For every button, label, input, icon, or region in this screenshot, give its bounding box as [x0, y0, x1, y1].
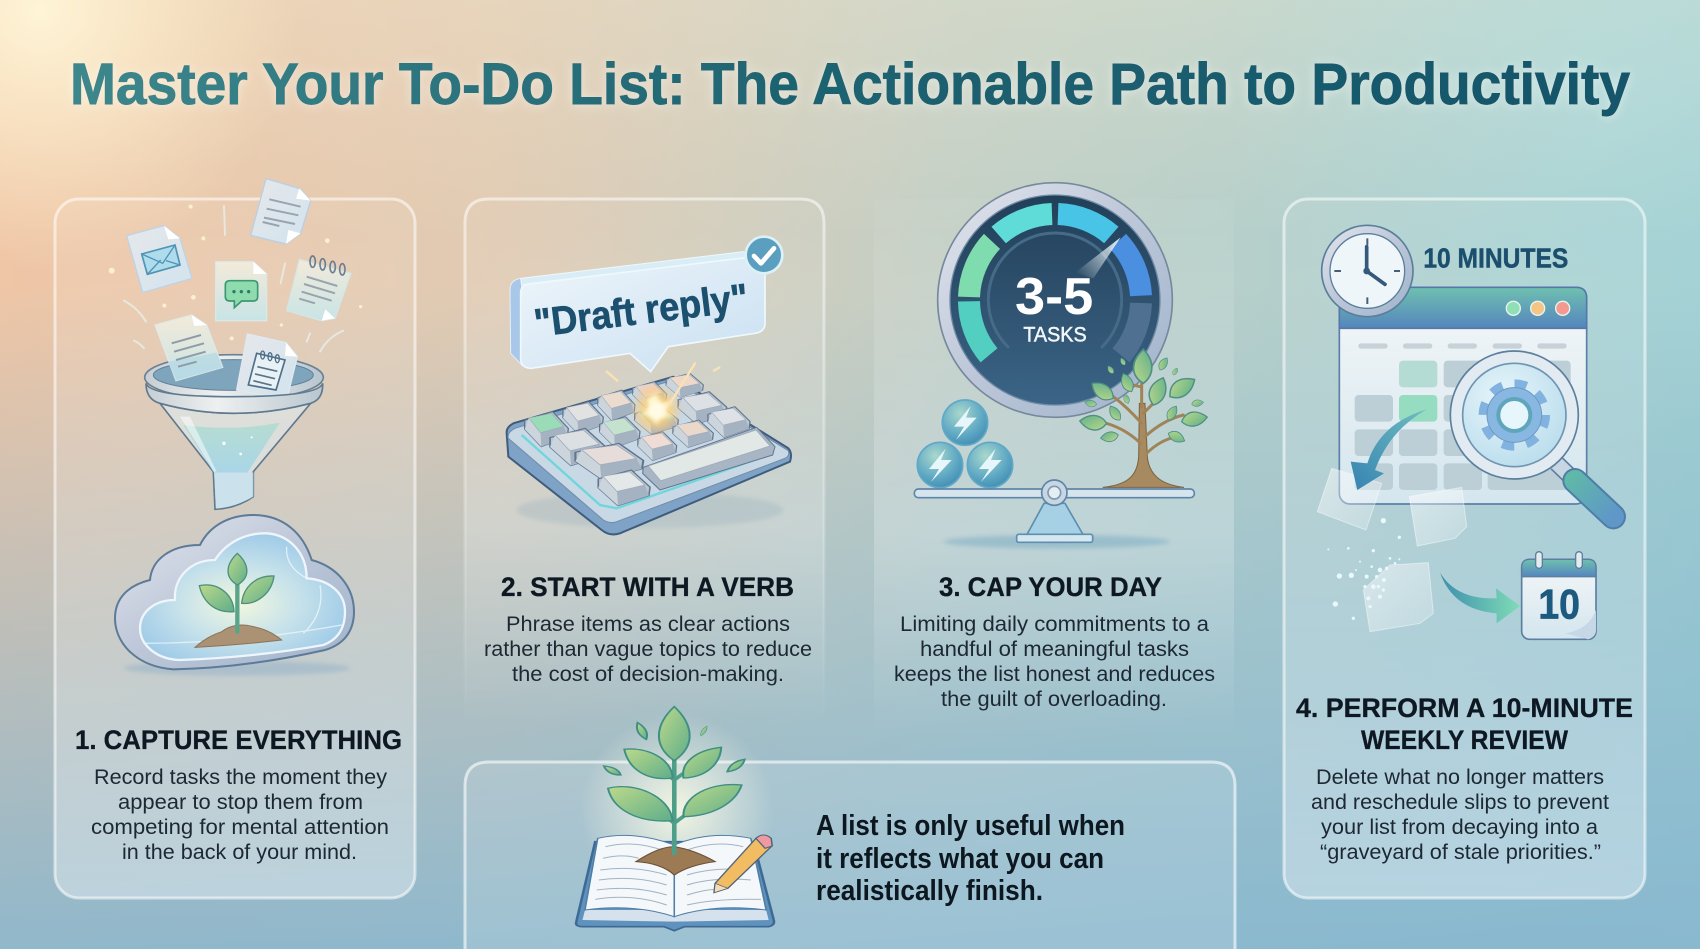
- balance scale: [914, 480, 1194, 548]
- page entering funnel left: [155, 315, 223, 381]
- panel: step 2 start with a verb: [465, 199, 824, 725]
- keyboard: [507, 363, 791, 534]
- gauge: [938, 183, 1172, 417]
- step 4 heading: WEEKLY REVIEW: [1361, 725, 1568, 755]
- step 3 body text: keeps the list honest and reduces: [894, 662, 1215, 686]
- speech bubble: [510, 252, 765, 372]
- small calendar with number 10: [1522, 552, 1596, 639]
- key press burst: [607, 363, 719, 437]
- takeaway text: [816, 810, 1125, 907]
- arrow: to rescheduled date: [1440, 573, 1520, 623]
- small calendar with number 10: 10: [1538, 580, 1580, 627]
- cloud: [115, 515, 354, 676]
- icon: documents dropping through a funnel into a cloud: [109, 179, 362, 676]
- funnel body: [146, 383, 323, 509]
- page entering funnel right: [237, 334, 297, 400]
- step 2 body text: [484, 612, 812, 686]
- step 3 body text: the guilt of overloading.: [941, 687, 1167, 711]
- step 4 heading: [1296, 693, 1633, 755]
- soil: [636, 847, 715, 875]
- icon: plant growing from open book: [576, 707, 774, 931]
- step 3 body text: Limiting daily commitments to a: [900, 612, 1209, 636]
- gauge: TASKS: [1023, 323, 1087, 347]
- funnel back rim: [145, 355, 323, 400]
- arrow: down to notes: [1351, 409, 1427, 490]
- panel: step 4 weekly review: [1284, 199, 1645, 898]
- step 2 body text: rather than vague topics to reduce: [484, 637, 812, 661]
- title: Master Your To-Do List: The Actionable Path to Productivity: [70, 52, 1630, 117]
- stale notes: [1317, 468, 1467, 632]
- top page: [251, 179, 311, 244]
- step 2 body text: the cost of decision-making.: [512, 662, 784, 686]
- step 1 body text: Record tasks the moment they: [94, 765, 387, 789]
- step 2 body text: Phrase items as clear actions: [506, 612, 790, 636]
- tree: [1079, 349, 1208, 487]
- speech bubble: "Draft reply": [532, 276, 750, 346]
- icon: calendar review: [1317, 225, 1613, 639]
- plant: [604, 707, 745, 855]
- sprout: [195, 553, 282, 647]
- panel: step 3 cap your day: [874, 183, 1234, 739]
- step 4 body text: “graveyard of stale priorities.”: [1320, 840, 1601, 864]
- envelope page: [127, 226, 192, 293]
- energy balls: [917, 400, 1013, 488]
- step 4 heading: 4. PERFORM A 10-MINUTE: [1296, 693, 1633, 723]
- step 4 body text: Delete what no longer matters: [1316, 765, 1604, 789]
- takeaway text: A list is only useful when: [816, 810, 1125, 842]
- step 1 body text: in the back of your mind.: [122, 840, 357, 864]
- chat page: [216, 262, 267, 321]
- step 1 body text: appear to stop them from: [118, 790, 363, 814]
- icon: gauge with balance: [914, 183, 1208, 548]
- step 1 heading: 1. CAPTURE EVERYTHING: [75, 725, 402, 755]
- panel: step 1 capture everything: [55, 179, 415, 898]
- takeaway text: it reflects what you can: [816, 843, 1104, 875]
- dissolving particles: [1327, 518, 1401, 620]
- notebook page: [287, 256, 351, 321]
- step 2 heading: 2. START WITH A VERB: [501, 572, 794, 602]
- pencil: [714, 835, 772, 893]
- icon: speech bubble over keyboard: [507, 237, 791, 534]
- step 3 body text: [894, 612, 1215, 711]
- check badge: [746, 237, 782, 273]
- step 4 body text: [1311, 765, 1609, 864]
- panel: takeaway: [465, 707, 1235, 949]
- gauge: 3-5: [1015, 267, 1093, 325]
- open book: [576, 835, 774, 931]
- step 4 body text: your list from decaying into a: [1321, 815, 1598, 839]
- step 4 body text: and reschedule slips to prevent: [1311, 790, 1609, 814]
- clock: [1322, 225, 1413, 317]
- calendar window: [1339, 287, 1587, 504]
- magnifying glass with gear: [1450, 351, 1613, 517]
- step 1 body text: [91, 765, 389, 864]
- takeaway text: realistically finish.: [816, 875, 1043, 907]
- step 3 body text: handful of meaningful tasks: [920, 637, 1189, 661]
- step 3 heading: 3. CAP YOUR DAY: [939, 572, 1162, 602]
- step 1 body text: competing for mental attention: [91, 815, 389, 839]
- 10 minutes label: 10 MINUTES: [1423, 243, 1568, 274]
